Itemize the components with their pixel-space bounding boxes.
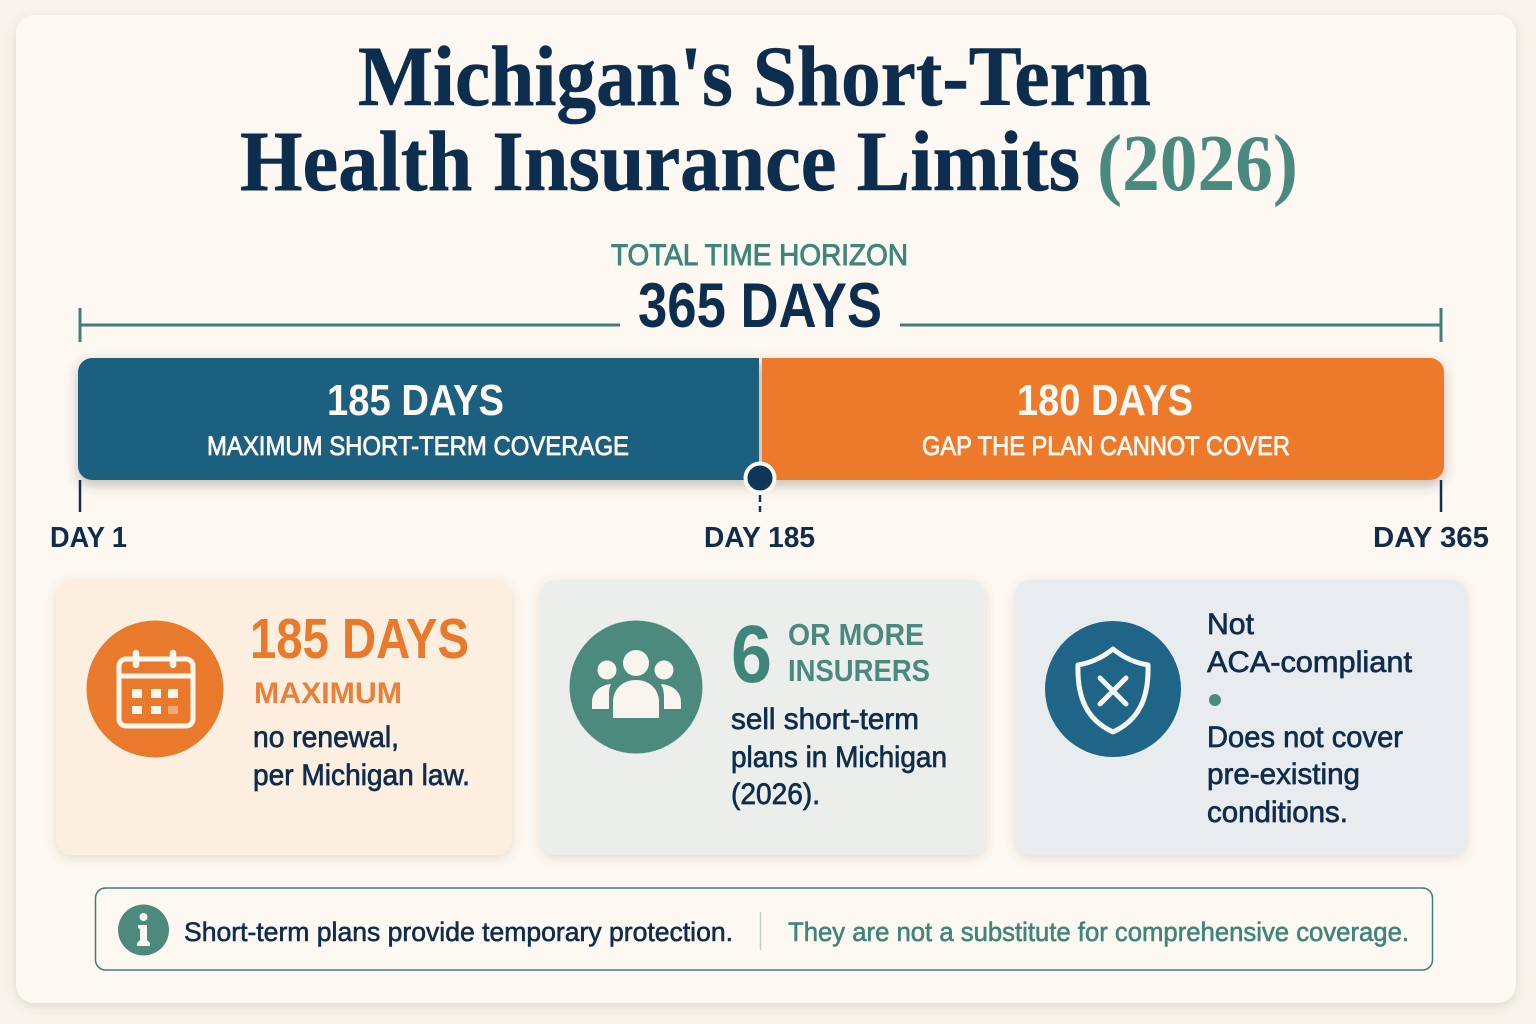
text: not ACA-compliant: Not [1207,608,1255,641]
segment: 185 days coverage [78,358,759,480]
label: or more insurers [788,617,930,688]
text: does not cover pre-existing conditions: conditions. [1207,796,1348,829]
text: no renewal: no renewal, [253,721,399,754]
title: (2026) [1097,120,1298,208]
day labels: DAY 185 [704,522,815,554]
segment: 180 days gap [762,358,1444,480]
stat: 6: 6 [731,609,772,700]
panel: 185 days maximum [56,580,512,855]
icon: calendar [86,620,224,758]
text: sell short-term plans: sell short-term [731,703,919,736]
day labels [50,522,1489,554]
text: temporary protection: Short-term plans provide temporary protection. [184,917,733,947]
text: not ACA-compliant: ACA-compliant [1207,646,1413,679]
day labels: DAY 1 [50,522,127,554]
segment: 180 days gap: GAP THE PLAN CANNOT COVER [922,431,1290,461]
text: does not cover pre-existing conditions: pre-existing [1207,758,1360,791]
icon: info [118,904,169,956]
label: maximum: MAXIMUM [254,677,402,710]
title [240,28,1298,209]
label: or more insurers: INSURERS [788,653,930,688]
panel: not ACA-compliant [1015,580,1467,855]
day labels: DAY 365 [1373,522,1489,554]
segment: 185 days coverage: MAXIMUM SHORT-TERM COVERAGE [207,431,629,461]
text: sell short-term plans: plans in Michigan [731,741,947,774]
text: not ACA-compliant [1207,608,1413,679]
label: or more insurers: OR MORE [788,617,924,652]
text: sell short-term plans [731,703,947,811]
segment: 180 days gap: 180 DAYS [1017,376,1193,425]
text: sell short-term plans: (2026). [731,778,820,811]
text: does not cover pre-existing conditions [1207,721,1403,829]
title: Michigan's Short-Term [358,28,1151,124]
timeline markers [80,464,1441,512]
total time horizon heading: TOTAL TIME HORIZON [611,239,908,272]
icon: shield with x [1045,621,1181,757]
segment: 185 days coverage: 185 DAYS [327,376,504,425]
timeline bar [78,358,1444,480]
text: no renewal [253,721,470,792]
bullet dot [1209,694,1221,706]
timeline bracket [80,308,1441,342]
text: no renewal: per Michigan law. [253,759,470,792]
panel: 6 or more insurers [540,580,986,855]
notice bar [96,888,1432,970]
icon: people [570,620,702,754]
total time horizon heading [611,239,908,341]
stat: 185 days: 185 DAYS [250,607,469,671]
text: does not cover pre-existing conditions: Does not cover [1207,721,1403,754]
title: Health Insurance Limits [240,113,1080,209]
text: not a substitute: They are not a substitute for comprehensive coverage. [788,917,1409,947]
total time horizon heading: 365 DAYS [638,271,882,341]
